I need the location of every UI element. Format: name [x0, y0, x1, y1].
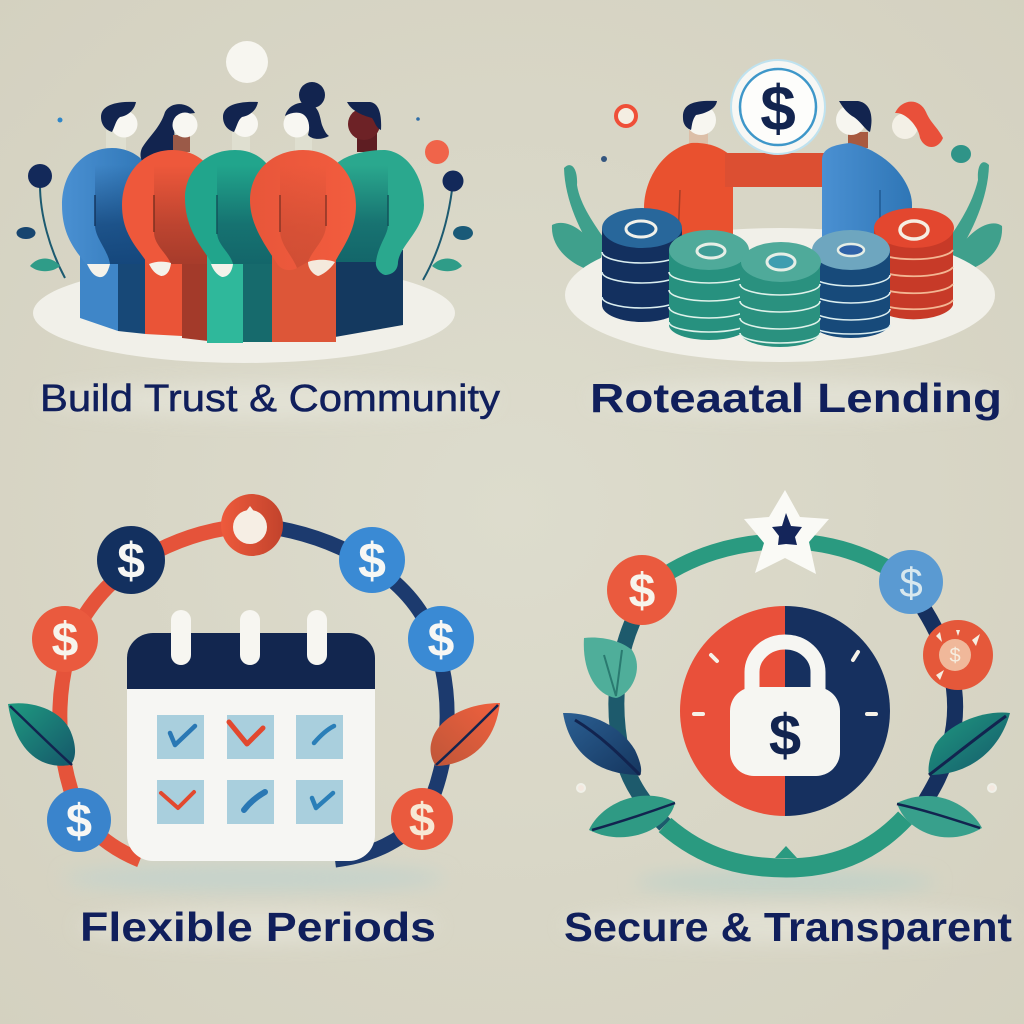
- node: orange gem: $: [949, 645, 961, 667]
- ring: right segment: [918, 600, 955, 810]
- decorative ring and dots: [601, 106, 971, 163]
- label glow: [45, 382, 495, 418]
- calendar: [127, 610, 375, 861]
- coin stack: red: [874, 208, 954, 319]
- coin stack: green left: [669, 230, 749, 340]
- panel: build trust and community: [16, 41, 500, 420]
- label: flexible periods: Flexible Periods: [80, 904, 436, 950]
- node: clock: [221, 494, 283, 556]
- node: dollar blue right: [408, 606, 474, 672]
- left person: [644, 101, 825, 240]
- node: dollar orange bottom right: $: [409, 793, 435, 846]
- left plant: [16, 164, 65, 278]
- right person: [822, 101, 912, 240]
- calendar date cells: [157, 715, 343, 824]
- person 4: orange with hair bun: [250, 82, 356, 342]
- right plant: [948, 162, 1002, 272]
- leaf: navy: [563, 713, 641, 775]
- leaf: green lower left: [589, 796, 675, 837]
- dial ticks: [694, 652, 876, 714]
- person 2: orange with long hair: [122, 104, 212, 341]
- label: secure and transparent: Secure & Transparent: [564, 904, 1012, 950]
- ring: left segment: [616, 610, 665, 825]
- ring: right segment: [252, 525, 447, 860]
- leaf: green: [8, 703, 75, 766]
- decorative dots: [577, 784, 996, 792]
- node: dollar navy: $: [117, 533, 145, 589]
- dollar coin: $: [760, 72, 796, 144]
- node: dollar orange: $: [629, 565, 656, 618]
- node: dollar orange left: [32, 606, 98, 672]
- leaf: green upper right: [929, 713, 1010, 775]
- ring: bottom segment: [665, 818, 905, 868]
- white platform: [565, 228, 995, 362]
- calendar binding rings: [171, 610, 327, 665]
- node: dollar blue: $: [899, 559, 923, 606]
- ground shadow: [635, 870, 935, 894]
- coin stack: navy: [602, 208, 682, 322]
- node: dollar blue top right: [339, 527, 405, 593]
- leaf: teal: [584, 638, 637, 698]
- label glow: [591, 380, 1001, 416]
- coin stack: green centre: [740, 242, 821, 347]
- ring: top segment: [650, 541, 915, 585]
- node: dollar blue top right: $: [358, 533, 386, 589]
- label glow: [78, 908, 438, 944]
- node: dollar orange left: $: [52, 614, 79, 667]
- shield dial: [680, 606, 890, 816]
- node: dollar navy: [97, 526, 165, 594]
- ring notch: [775, 846, 797, 858]
- panel: rotational lending: [552, 60, 1002, 421]
- coin stack: blue: [812, 230, 890, 338]
- leaf: orange: [431, 703, 500, 766]
- person 1: blue: [62, 102, 150, 334]
- right plant: [423, 170, 473, 280]
- ring: left segment: [60, 525, 252, 860]
- calendar check marks: [161, 722, 334, 810]
- icon: white sun circle: [226, 41, 268, 83]
- node: dollar blue bottom left: [47, 788, 111, 852]
- person 3: green: [185, 102, 272, 343]
- ground shadow: [65, 864, 445, 892]
- label: rotational lending: Roteaatal Lending: [590, 375, 1002, 421]
- white platform: [33, 263, 455, 363]
- padlock: $: [769, 703, 801, 768]
- node: dollar blue: [879, 550, 943, 614]
- node: dollar blue bottom left: $: [66, 794, 92, 847]
- node: dollar orange bottom right: [391, 788, 453, 850]
- person 5: green with dark skin: [335, 102, 424, 337]
- left plant: [552, 165, 605, 272]
- star badge: [744, 490, 829, 574]
- dollar coin: [731, 60, 825, 154]
- padlock: [730, 642, 840, 776]
- node: dollar orange: [607, 555, 677, 625]
- panel: secure and transparent: [563, 490, 1013, 950]
- leaf: green lower right: [897, 796, 982, 837]
- panel: flexible periods: [8, 494, 500, 950]
- node: dollar blue right: $: [428, 614, 455, 667]
- decorative dots: [58, 117, 449, 164]
- label glow: [563, 908, 1013, 944]
- distant person head with red hair: [892, 102, 943, 147]
- node: orange gem: [923, 620, 993, 690]
- label: build trust and community: Build Trust & Community: [40, 378, 500, 420]
